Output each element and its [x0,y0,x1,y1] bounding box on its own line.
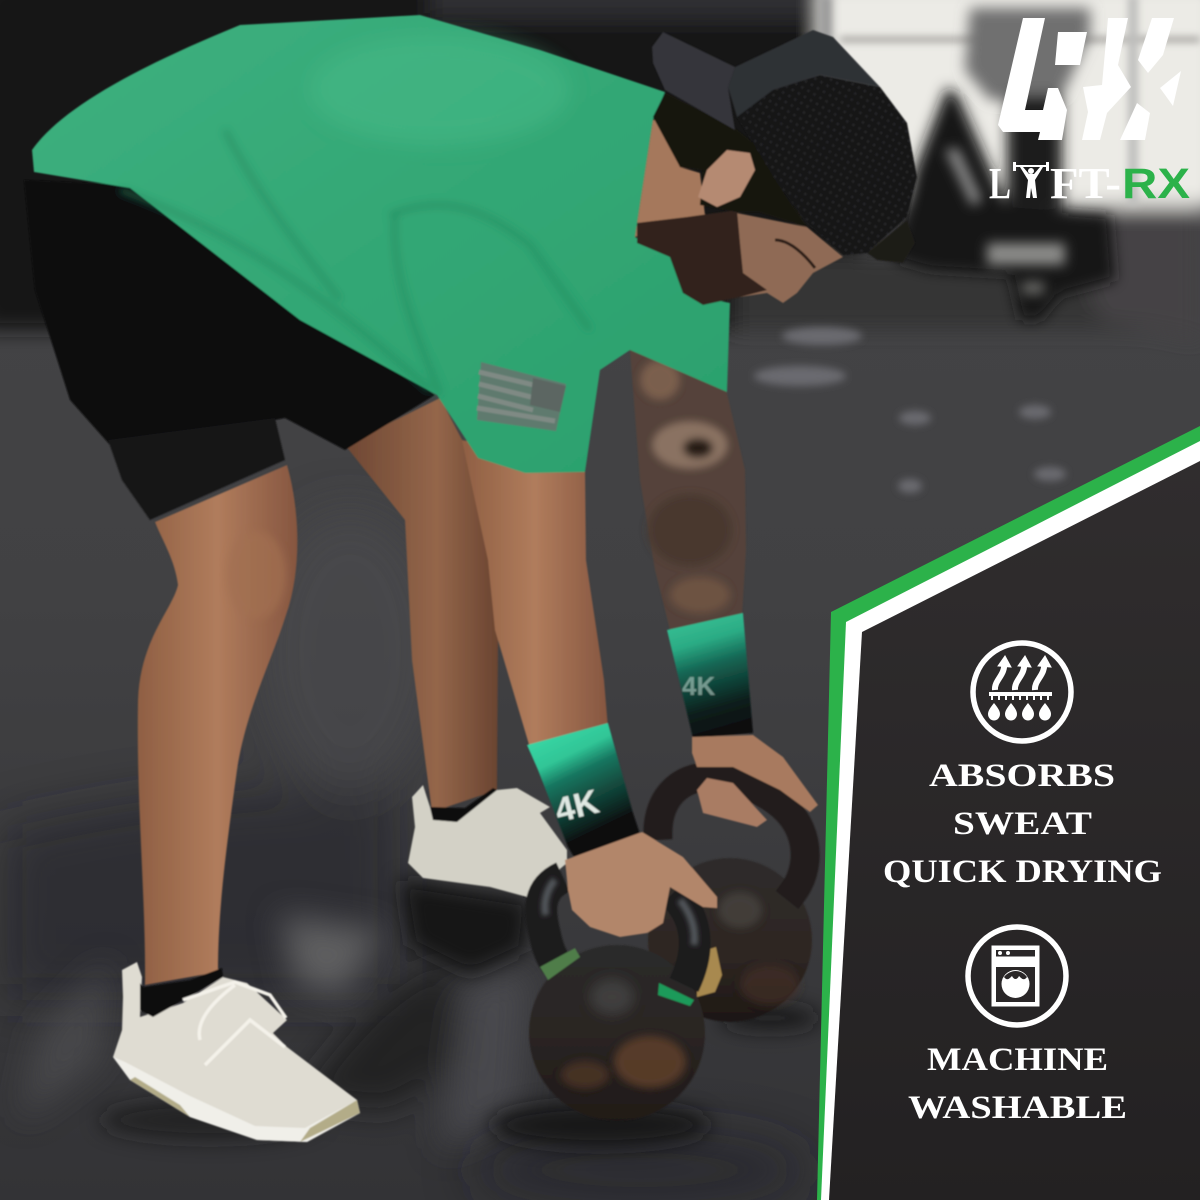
beard [637,210,767,305]
near leg [138,465,297,985]
logo: LIFT-RX wordmark: FT- [1050,159,1121,208]
near sock [140,968,223,1017]
text: absorbs sweat quick drying: ABSORBS [929,758,1115,794]
icon: weightlifter [1013,162,1049,198]
knee shading [226,531,286,619]
far leg [345,398,498,812]
near arm [462,440,608,748]
icon: washing machine [968,927,1066,1025]
far fingers [697,778,767,827]
floor streaks and shadows [20,915,530,1150]
hair [653,93,807,227]
water drops [988,703,1051,721]
logo: LIFT-RX wordmark: L [989,159,1011,208]
text: absorbs sweat quick drying: SWEAT [953,806,1092,842]
near kettlebell [529,877,705,1121]
logo: 4K mark [998,18,1181,140]
athlete lifting kettlebells [24,15,917,1142]
far wristband [667,613,753,738]
far band logo: 4K [682,671,715,701]
logo: LIFT-RX wordmark [989,159,1190,208]
text: absorbs sweat quick drying [883,758,1162,890]
near shoe sole [113,1057,360,1142]
far shoe [408,785,567,897]
cap front panel [728,30,880,117]
panel: dark background [829,461,1200,1200]
eye brow [775,240,815,268]
far sock [430,788,497,822]
shirt [32,15,730,473]
vapour arrows [995,662,1044,690]
text: machine washable: MACHINE [927,1042,1108,1078]
near hand [565,832,717,937]
icon: absorbs sweat [973,643,1071,741]
sleeve flag [477,362,566,431]
cap mesh crown [737,75,917,255]
panel: green border [817,426,1200,1200]
far arm with tattoo [630,350,746,630]
text: absorbs sweat quick drying: QUICK DRYING [883,854,1162,890]
neck [635,120,705,237]
text: machine washable: WASHABLE [908,1090,1127,1126]
near wristband [527,723,642,862]
shoe laces [183,982,286,1065]
face [737,213,843,303]
compression tights [108,418,285,520]
near band logo: 4K [551,783,603,830]
shorts [24,180,435,450]
shirt folds [120,130,590,395]
far kettlebell [648,777,812,1022]
back hair [867,220,915,263]
panel: white border [821,441,1200,1200]
text: machine washable [908,1042,1127,1126]
shirt highlight [310,35,570,145]
ear [698,150,755,207]
cap brim [652,32,735,130]
near shoe [113,962,360,1142]
logo: LIFT-RX wordmark: RX [1122,160,1190,208]
far hand [692,735,818,812]
fabric bar [989,692,1052,696]
